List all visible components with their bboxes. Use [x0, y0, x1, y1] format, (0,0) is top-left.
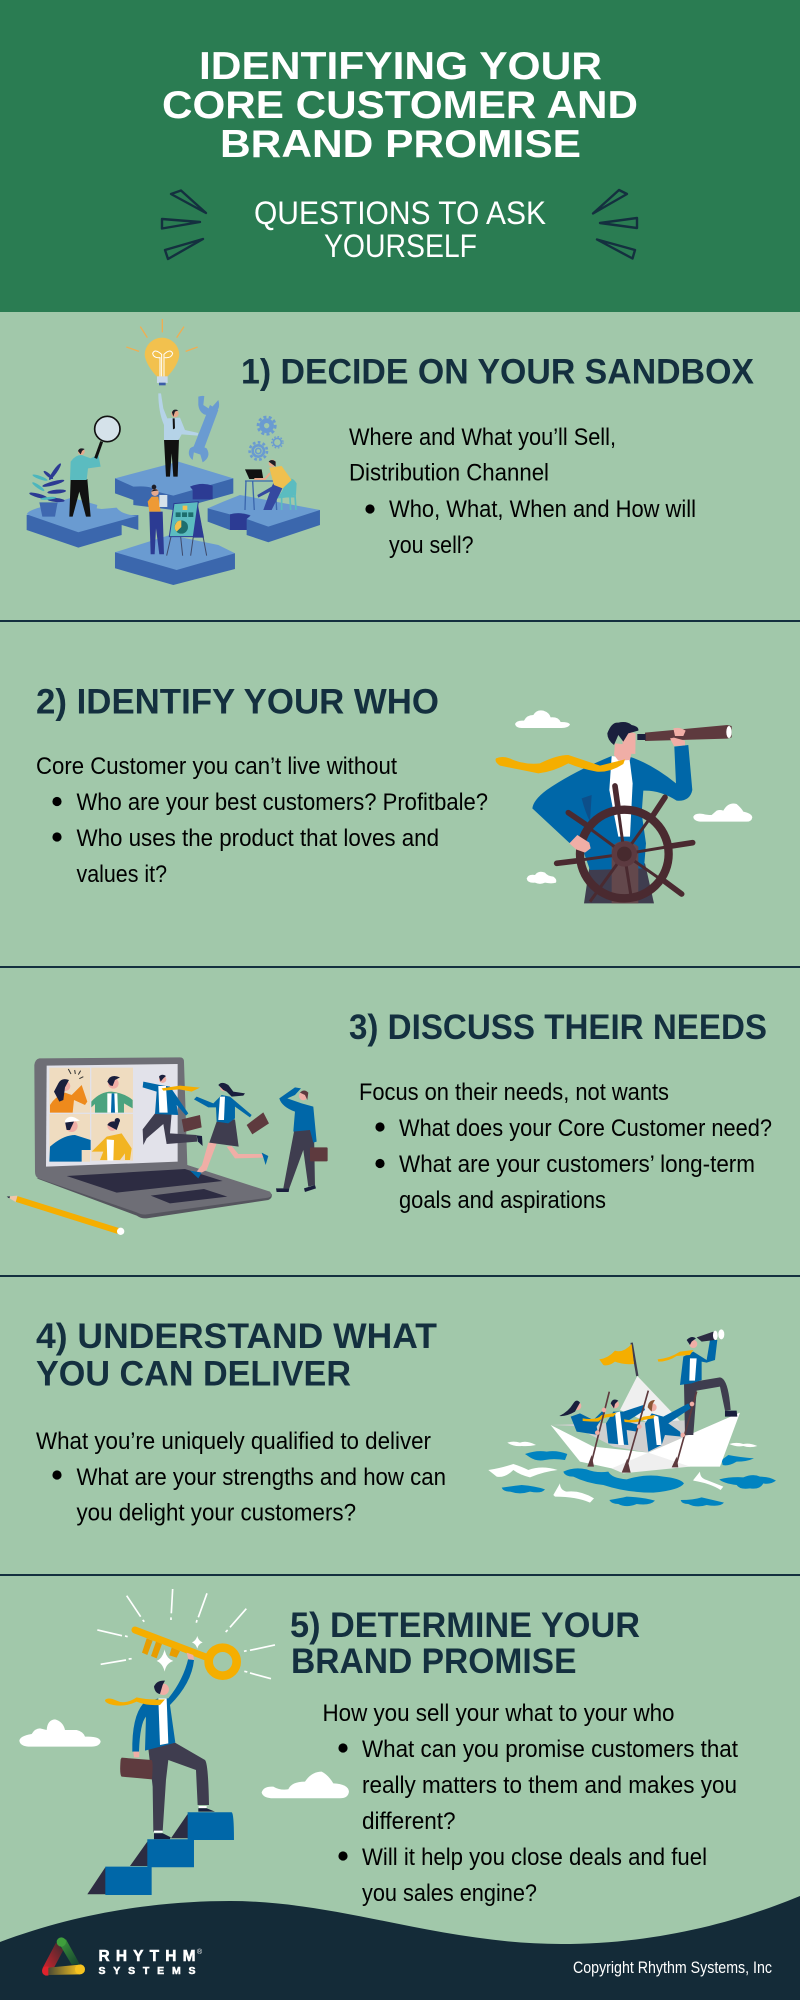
panel: section 3 needs — [7, 1008, 772, 1235]
icon: right burst — [593, 190, 637, 258]
subtitle: YOURSELF — [324, 228, 477, 264]
panel: section 5 brand promise — [19, 1589, 738, 1907]
subtitle: QUESTIONS TO ASK — [254, 195, 546, 231]
text block: who: Who uses the product that loves and — [76, 825, 439, 852]
copyright: Copyright Rhythm Systems, Inc — [573, 1959, 772, 1977]
title: CORE CUSTOMER AND — [162, 84, 638, 127]
text block: sandbox: Where and What you’ll Sell, — [349, 424, 616, 451]
icon: light bulb — [126, 319, 198, 385]
heading: understand what you can deliver: YOU CAN DELIVER — [36, 1354, 351, 1394]
text block: who — [36, 753, 488, 888]
panel: section 2 who — [36, 682, 752, 903]
text block: promise: really matters to them and makes you — [362, 1772, 737, 1799]
icon: sparkles — [157, 1636, 203, 1672]
text block: deliver — [36, 1428, 446, 1526]
figure: woman with board — [148, 485, 207, 556]
heading: determine your brand promise: BRAND PROMISE — [291, 1642, 576, 1681]
text block: promise: How you sell your what to your who — [322, 1700, 674, 1727]
heading: identify your who: 2) IDENTIFY YOUR WHO — [36, 682, 439, 722]
figure: running woman — [190, 1083, 269, 1178]
text block: needs: What does your Core Customer need? — [399, 1115, 772, 1142]
figure: standing man — [276, 1087, 328, 1192]
video call panels — [49, 1068, 133, 1162]
figures: rowers and lookout — [559, 1329, 737, 1473]
text block: deliver: What you’re uniquely qualified to deliver — [36, 1428, 431, 1455]
title — [162, 45, 638, 166]
panel: footer wave — [0, 1896, 800, 2000]
icon: plant — [29, 462, 66, 517]
heading: understand what you can deliver — [36, 1317, 437, 1394]
illustration: laptop meeting — [7, 1057, 328, 1235]
text block: promise: Will it help you close deals and fuel — [362, 1844, 707, 1871]
illustration: paper boat team — [488, 1329, 776, 1506]
icon: laptop — [34, 1057, 272, 1218]
title: BRAND PROMISE — [220, 123, 581, 166]
icon: wrench — [189, 396, 219, 462]
paper boat — [551, 1376, 740, 1473]
text block: promise: you sales engine? — [362, 1880, 537, 1907]
heading: determine your brand promise — [290, 1606, 640, 1681]
rays — [97, 1589, 275, 1679]
text block: promise: different? — [362, 1808, 456, 1835]
text block: sandbox: you sell? — [389, 532, 474, 559]
text block: deliver: you delight your customers? — [76, 1500, 356, 1526]
figure: businessman — [105, 1653, 215, 1839]
heading: discuss their needs: 3) DISCUSS THEIR NEEDS — [349, 1008, 767, 1047]
divider 4 — [0, 1574, 800, 1576]
divider 2 — [0, 966, 800, 968]
icon: gears — [250, 417, 283, 460]
illustration: man reaching for key — [19, 1589, 349, 1895]
text block: promise: What can you promise customers that — [362, 1736, 738, 1763]
text block: promise — [322, 1700, 738, 1907]
heading: understand what you can deliver: 4) UNDERSTAND WHAT — [36, 1317, 437, 1356]
figure: jumping man — [143, 1075, 203, 1146]
icon: pencil — [7, 1196, 124, 1235]
icon: white foam — [488, 1442, 757, 1503]
panel: section 4 deliver — [36, 1317, 776, 1526]
icon: water — [502, 1451, 776, 1506]
text block: who: Core Customer you can’t live without — [36, 753, 397, 780]
text block: sandbox — [349, 424, 696, 559]
text block: needs: What are your customers’ long-term — [399, 1151, 755, 1178]
illustration: puzzle team — [27, 319, 320, 585]
icon: rhythm logo — [42, 1937, 85, 1976]
icon: clouds — [19, 1719, 349, 1798]
logo wordmark: RHYTHM — [98, 1948, 196, 1965]
text block: needs: goals and aspirations — [399, 1187, 606, 1214]
figure: person at laptop — [245, 460, 297, 510]
text block: needs: Focus on their needs, not wants — [359, 1079, 669, 1106]
text block: who: Who are your best customers? Profitbale? — [76, 789, 488, 816]
icon: left burst — [162, 190, 206, 259]
text block: deliver: What are your strengths and how can — [76, 1464, 446, 1491]
title: IDENTIFYING YOUR — [199, 45, 602, 88]
subtitle — [254, 195, 546, 264]
text block: sandbox: Distribution Channel — [349, 460, 549, 486]
logo wordmark: SYSTEMS — [98, 1965, 196, 1977]
logo wordmark — [98, 1948, 203, 1977]
logo wordmark: ® — [197, 1948, 203, 1956]
icon: key — [135, 1630, 237, 1676]
heading: determine your brand promise: 5) DETERMINE YOUR — [290, 1606, 640, 1645]
text block: needs — [359, 1079, 772, 1214]
illustration: captain with telescope — [495, 710, 752, 903]
divider 3 — [0, 1275, 800, 1277]
text block: sandbox: Who, What, When and How will — [389, 496, 696, 523]
ship wheel — [557, 786, 693, 903]
figure: man with magnifier — [69, 416, 120, 517]
figure: man with raised arm — [158, 393, 198, 477]
icon: stairs — [87, 1812, 234, 1895]
text block: who: values it? — [76, 861, 167, 888]
panel: section 1 sandbox — [27, 319, 755, 585]
icon: flag — [599, 1343, 637, 1376]
panel: header — [0, 0, 800, 312]
icon: clouds — [515, 710, 752, 884]
heading: decide on your sandbox: 1) DECIDE ON YOUR SANDBOX — [241, 352, 755, 392]
divider 1 — [0, 620, 800, 622]
